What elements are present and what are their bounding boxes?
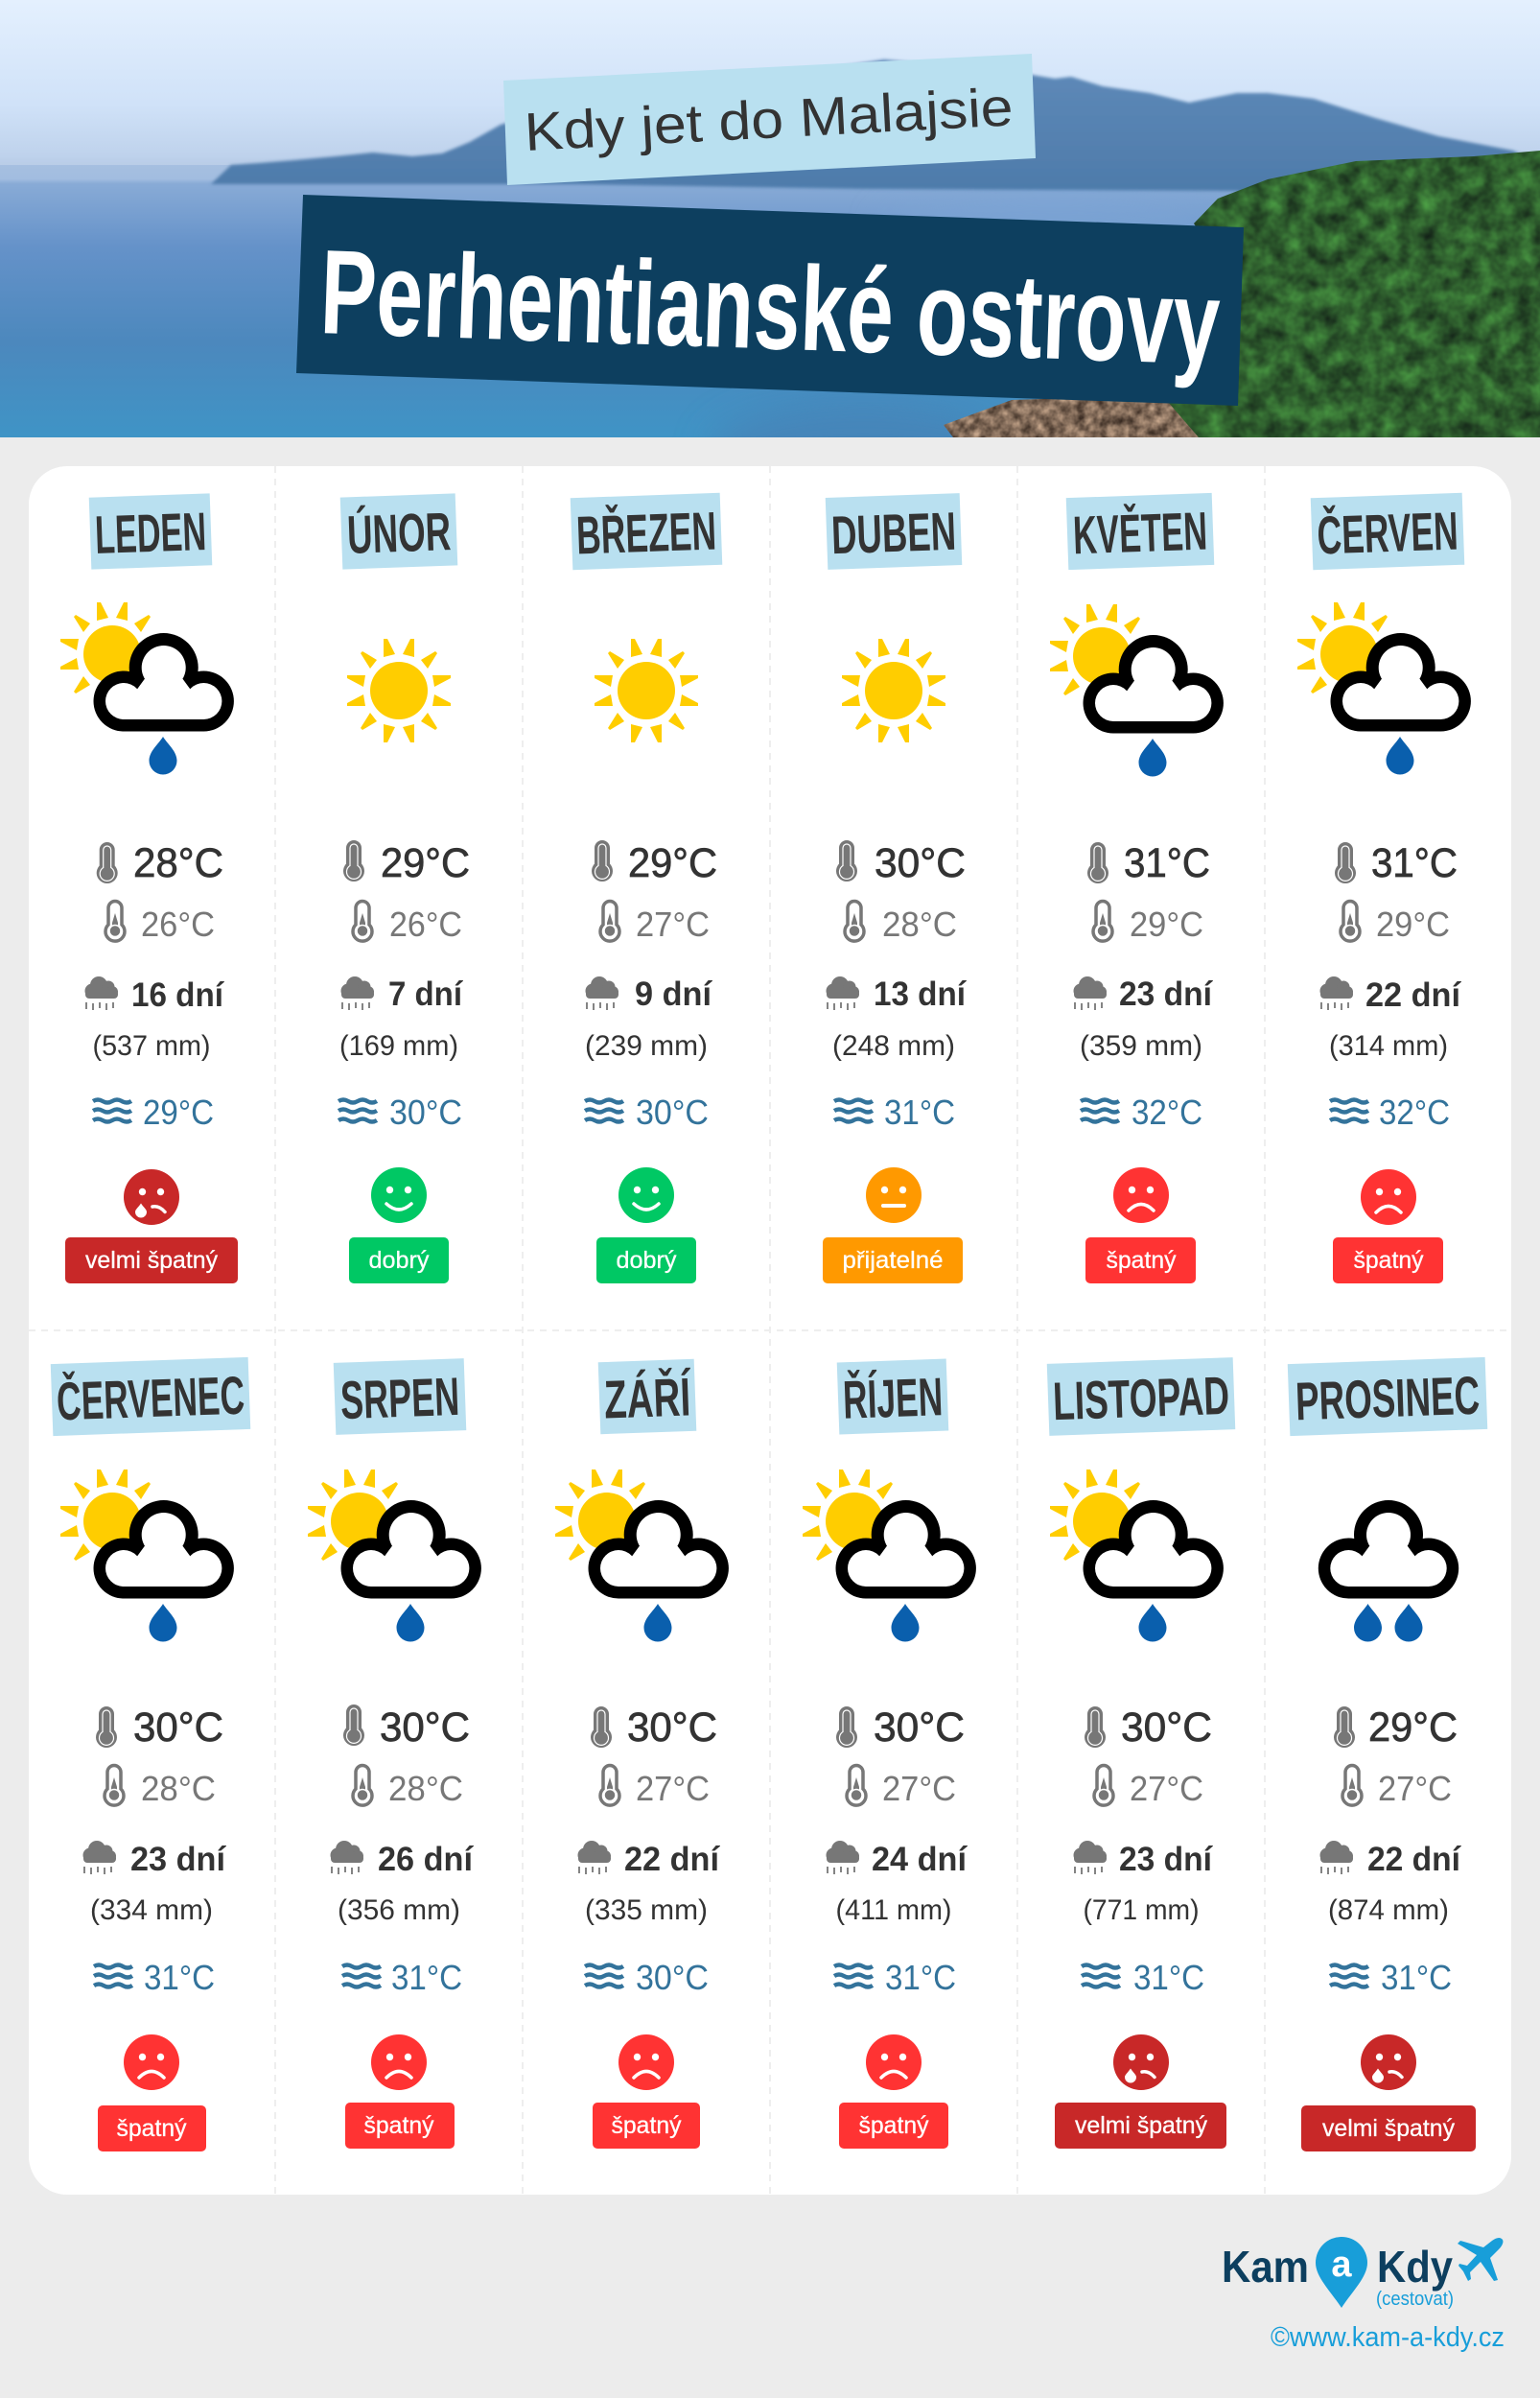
icon: min thermometer [1094,1765,1113,1805]
weather icon [1297,602,1471,775]
icon: max thermometer [1335,842,1356,883]
icon: face [1113,1167,1169,1223]
max temperature: 30°C [1121,1704,1212,1751]
rainfall: (169 mm) [339,1030,458,1062]
month label [826,493,962,570]
rainy days: 23 dní [1119,976,1213,1013]
icon: waves [338,1099,377,1122]
icon: rain cloud [1319,976,1353,1010]
rating: špatný [1107,1247,1177,1274]
min temperature: 28°C [388,1769,463,1808]
icon: max thermometer [1087,842,1108,883]
month: duben [823,493,967,1283]
min temperature: 27°C [1378,1769,1452,1808]
rating [1085,1237,1196,1283]
weather icon [555,1469,729,1642]
icon: max thermometer [592,840,613,882]
rating: špatný [117,2115,187,2142]
month label [1288,1357,1487,1436]
icon: waves [834,1099,873,1122]
rainy days: 24 dní [872,1841,968,1878]
rainy days: 7 dní [388,976,463,1013]
weather icon [347,639,451,742]
icon: face [866,2034,922,2090]
website credit: ©www.kam-a-kdy.cz [1271,2322,1505,2353]
rating: přijatelné [842,1247,944,1274]
max temperature: 29°C [381,840,470,886]
rating [349,1237,449,1283]
month label [598,1359,696,1434]
rating: dobrý [616,1247,677,1274]
month label [1047,1357,1235,1436]
panel: climate table card [29,466,1511,2195]
rating [596,1237,696,1283]
rating [593,2103,700,2149]
footer logo: Kam [1222,2242,1309,2292]
row: January to June [60,493,1471,1283]
rainy days: 9 dní [635,976,712,1013]
weather icon [595,639,698,742]
max temperature: 30°C [380,1704,470,1751]
icon: waves [585,1099,623,1122]
month label [89,493,212,570]
min temperature: 28°C [882,905,957,944]
rating: špatný [612,2112,682,2139]
icon: face [1361,1169,1416,1225]
icon: max thermometer [836,1706,857,1748]
month: červen [1297,493,1471,1283]
month: říjen [803,1359,976,2149]
icon: min thermometer [353,1765,372,1805]
icon: rain cloud [341,976,374,1010]
icon: rain cloud [827,1841,859,1874]
max temperature: 31°C [1124,840,1210,886]
month label: ČERVENEC [56,1365,245,1431]
rating: špatný [859,2112,929,2139]
rainfall: (537 mm) [92,1030,211,1062]
month label [51,1357,250,1436]
rating [1301,2105,1476,2151]
icon: min thermometer [105,902,125,941]
rating: velmi špatný [1322,2115,1455,2142]
footer logo [1222,2237,1503,2310]
sea temperature: 31°C [884,1093,955,1132]
month: září [555,1359,729,2149]
rainfall: (314 mm) [1329,1030,1448,1062]
min temperature: 28°C [141,1769,216,1808]
sea temperature: 31°C [391,1958,462,1997]
icon: face [124,1169,179,1225]
min temperature: 27°C [882,1769,956,1808]
rainy days: 22 dní [624,1841,720,1878]
icon: max thermometer [343,1704,364,1746]
icon: min thermometer [105,1765,124,1805]
icon: face [1113,2034,1169,2090]
weather icon [1318,1500,1458,1642]
month: listopad [1047,1357,1235,2149]
max temperature: 29°C [628,840,717,886]
rating [65,1237,238,1283]
icon: face [124,2034,179,2090]
month label [571,493,722,570]
row: July to December [51,1357,1487,2151]
max temperature: 30°C [875,840,966,886]
rating: špatný [1354,1247,1424,1274]
month: květen [1050,493,1224,1283]
rating: velmi špatný [1075,2112,1207,2139]
icon: map pin [1316,2237,1367,2308]
icon: face [371,2034,427,2090]
icon: rain cloud [585,976,618,1010]
icon: face [371,1167,427,1223]
rainfall: (239 mm) [585,1030,708,1062]
subtitle banner [503,54,1036,185]
min temperature: 26°C [141,905,215,944]
icon: face [866,1167,922,1223]
icon: plane [1458,2238,1503,2281]
sea temperature: 31°C [1133,1958,1204,1997]
rainfall: (411 mm) [836,1894,951,1926]
rating: špatný [364,2112,434,2139]
title banner [296,195,1244,406]
min temperature: 29°C [1130,905,1203,944]
month: srpen [308,1358,481,2149]
sea temperature: 29°C [143,1093,214,1132]
rating [823,1237,963,1283]
icon: rain cloud [84,976,118,1010]
month label: ZÁŘÍ [603,1366,692,1430]
sea temperature: 32°C [1132,1093,1202,1132]
icon: min thermometer [1341,902,1360,941]
icon: min thermometer [847,1765,866,1805]
icon: waves [1330,1099,1368,1122]
icon: min thermometer [1342,1765,1362,1805]
icon: waves [1082,1964,1120,1987]
month label: BŘEZEN [575,500,717,566]
rating [839,2103,948,2149]
rainy days: 22 dní [1365,976,1461,1014]
rainfall: (334 mm) [90,1894,213,1926]
min temperature: 29°C [1376,905,1450,944]
min temperature: 27°C [636,905,710,944]
icon: max thermometer [343,840,364,882]
weather icon [308,1469,481,1642]
month label [1311,493,1464,570]
month label: SRPEN [339,1366,460,1430]
max temperature: 30°C [874,1704,965,1751]
rainfall: (356 mm) [338,1894,460,1926]
max temperature: 31°C [1371,840,1458,886]
weather icon [842,639,945,742]
rainy days: 23 dní [1119,1841,1213,1878]
max temperature: 29°C [1368,1704,1458,1751]
month label: LEDEN [94,501,207,565]
icon: max thermometer [1085,1706,1106,1748]
weather icon [60,602,234,775]
icon: waves [93,1099,131,1122]
icon: max thermometer [836,840,857,882]
icon: face [618,1167,674,1223]
min temperature: 26°C [389,905,462,944]
sea temperature: 30°C [389,1093,462,1132]
icon: map pin: a [1331,2245,1352,2285]
icon: min thermometer [353,902,372,941]
rating: dobrý [368,1247,430,1274]
max temperature: 30°C [133,1704,223,1751]
icon: waves [1081,1099,1119,1122]
month label: KVĚTEN [1072,501,1208,565]
icon: waves [94,1964,132,1987]
month label: ŘÍJEN [842,1366,944,1430]
rating [98,2105,206,2151]
month: prosinec [1288,1357,1487,2151]
icon: min thermometer [600,1765,619,1805]
icon: rain cloud [1319,1841,1353,1874]
rating [1333,1237,1443,1283]
month label [837,1359,948,1434]
rainfall: (771 mm) [1084,1894,1199,1926]
weather icon [1050,604,1224,777]
sea temperature: 30°C [636,1958,709,1997]
icon: rain cloud [330,1841,363,1874]
icon: max thermometer [591,1706,612,1748]
sea temperature: 30°C [636,1093,709,1132]
month: březen [571,493,722,1283]
min temperature: 27°C [1130,1769,1203,1808]
weather icon [1050,1469,1224,1642]
max temperature: 30°C [627,1704,717,1751]
rainy days: 23 dní [130,1841,226,1878]
icon: face [1361,2034,1416,2090]
weather icon [803,1469,976,1642]
icon: rain cloud [1074,1841,1107,1874]
icon: min thermometer [845,902,864,941]
month label: ČERVEN [1316,500,1459,566]
month label: ÚNOR [346,501,452,565]
icon: waves [1330,1964,1368,1987]
month label [1066,493,1214,570]
month: únor [338,493,470,1283]
min temperature: 27°C [636,1769,710,1808]
icon: rain cloud [827,976,859,1010]
rainfall: (874 mm) [1328,1894,1449,1926]
icon: rain cloud [1074,976,1107,1010]
month label [340,493,457,570]
rainfall: (248 mm) [832,1030,955,1062]
month label: LISTOPAD [1052,1365,1230,1431]
icon: waves [585,1964,623,1987]
month label [334,1358,466,1435]
icon: rain cloud [577,1841,611,1874]
rainfall: (359 mm) [1080,1030,1202,1062]
sea temperature: 31°C [885,1958,956,1997]
rainy days: 13 dní [874,976,967,1013]
rainy days: 22 dní [1367,1841,1461,1878]
icon: max thermometer [96,1706,117,1748]
icon: max thermometer [97,842,118,883]
icon: waves [834,1964,873,1987]
subtitle banner: Kdy jet do Malajsie [523,76,1015,162]
month: červenec [51,1357,250,2151]
icon: min thermometer [1093,902,1112,941]
sea temperature: 31°C [144,1958,215,1997]
rainy days: 26 dní [378,1841,474,1878]
rating [345,2103,455,2149]
month: leden [60,493,238,1283]
icon: face [618,2034,674,2090]
footer logo: (cestovat) [1376,2289,1454,2310]
max temperature: 28°C [133,840,223,886]
icon: min thermometer [600,902,619,941]
footer logo: Kdy [1377,2242,1453,2292]
sea temperature: 32°C [1379,1093,1450,1132]
rainfall: (335 mm) [585,1894,708,1926]
rainy days: 16 dní [131,976,224,1014]
hero photo: sea and islands [0,0,1540,437]
icon: max thermometer [1334,1706,1355,1748]
rating: velmi špatný [85,1247,218,1274]
month label: DUBEN [830,501,957,565]
rating [1055,2103,1226,2149]
sea temperature: 31°C [1381,1958,1452,1997]
weather icon [60,1469,234,1642]
icon: rain cloud [82,1841,116,1874]
icon: waves [342,1964,381,1987]
